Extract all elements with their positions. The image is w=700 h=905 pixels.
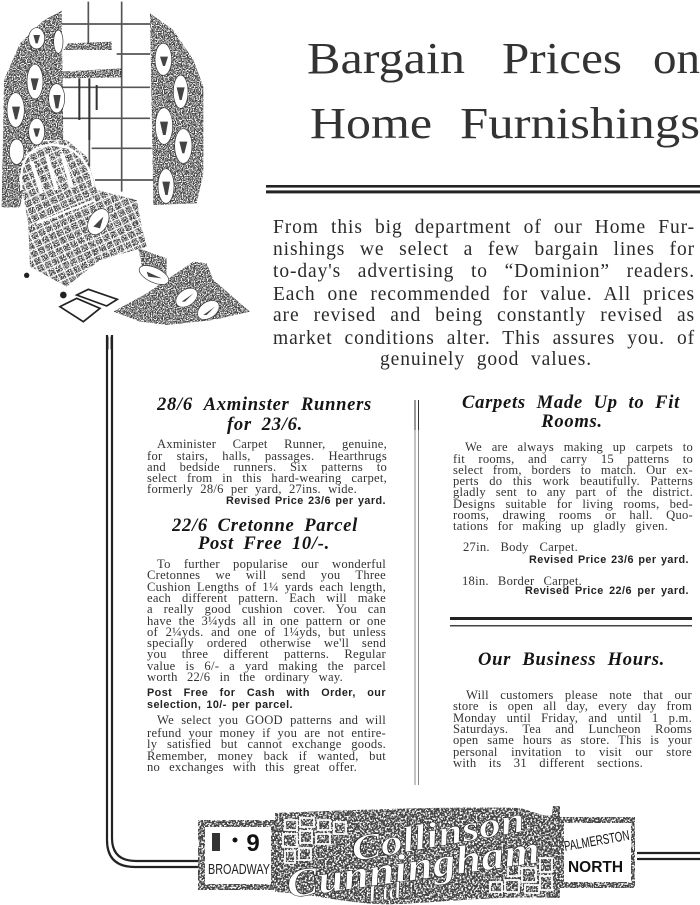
frame rule: left vertical, corner and horizontal to the banner <box>106 335 198 868</box>
prices: carpets <box>462 540 689 597</box>
text: Cretonne Parcel: Cushion Lengths of 1¼ yards each length, <box>147 580 386 594</box>
heading: Carpets Made Up: Rooms. <box>541 411 603 432</box>
oval motifs <box>12 35 215 315</box>
right rule <box>637 853 700 859</box>
text: Carpets Made Up: gladly sent to any part of the district. <box>453 485 693 499</box>
wicker lattice <box>17 140 147 287</box>
title: Bargain <box>307 35 465 83</box>
text: Cretonne Parcel: no exchanges with this great offer. <box>147 760 357 774</box>
intro paragraph: From this big department of our Home Fur- <box>273 217 695 238</box>
text: Cretonne Parcel: selection, 10/- per parcel. <box>147 699 293 711</box>
text: Cretonne Parcel: worth 22/6 in the ordinary way. <box>147 670 343 684</box>
text: Cretonne Parcel: To further popularise our wonderful <box>157 557 386 571</box>
prices: carpets: Revised Price 23/6 per yard. <box>529 554 689 566</box>
text: Our Business Hours: Monday until Friday, and until 1 p.m. <box>453 711 692 725</box>
tassels <box>79 78 97 140</box>
banner: Collinson Cunningham store sign <box>198 800 700 905</box>
heading: Cretonne Parcel: 22/6 Cretonne Parcel <box>172 515 358 536</box>
title: Prices <box>502 35 622 83</box>
left address plate: 9 <box>246 830 260 857</box>
text: Cretonne Parcel: specially ordered otherwise we'll send <box>147 636 386 650</box>
intro paragraph: to-day's advertising to “Dominion” readers. <box>273 261 695 282</box>
left address plate <box>198 820 276 890</box>
heading: Our Business Hours: Our Business Hours. <box>478 649 665 670</box>
text: Cretonne Parcel: a really good cushion cover. You can <box>147 602 386 616</box>
heading: Cretonne Parcel: Post Free 10/-. <box>198 533 330 554</box>
right address plate <box>558 817 635 888</box>
text: Carpets Made Up: tations for making up gladly given. <box>453 519 668 533</box>
text: Axminster Runners: and bedside runners. Six patterns to <box>147 460 387 474</box>
intro paragraph <box>273 217 695 370</box>
intro paragraph: Each one recommended for value. All prices <box>273 284 695 305</box>
books on the floor <box>60 289 117 322</box>
text: Cretonne Parcel: We select you GOOD patterns and will <box>157 713 386 727</box>
text: Cretonne Parcel: ly satisfied but cannot exchange goods. <box>147 737 386 751</box>
text: Our Business Hours: Will customers please note that our <box>466 688 692 702</box>
title: Home <box>310 99 432 148</box>
text: Carpets Made Up: Designs suitable for living rooms, bed- <box>453 497 693 511</box>
prices: carpets: Revised Price 22/6 per yard. <box>525 585 689 597</box>
intro paragraph: nishings we select a few bargain lines for <box>273 239 695 260</box>
text: Axminster Runners: Revised Price 23/6 per yard. <box>226 495 386 507</box>
heading: Carpets Made Up <box>462 392 680 432</box>
text: Our Business Hours: with its 31 different sections. <box>453 756 643 770</box>
curtains <box>2 11 203 207</box>
text: Axminster Runners: for stairs, halls, passages. Hearthrugs <box>147 449 387 463</box>
illustration: wicker chair by curtained window <box>2 2 250 350</box>
heading: Axminster Runners: 28/6 Axminster Runners <box>157 394 372 415</box>
text: Carpets Made Up: select from, borders to match. Our ex- <box>453 463 693 477</box>
text: Carpets Made Up: perts do this work beautifully. Patterns <box>453 474 693 488</box>
text: Cretonne Parcel: Cretonnes we will send you Three <box>147 568 386 582</box>
centre column rule <box>414 400 419 785</box>
right address plate: NORTH <box>568 859 623 876</box>
heading: Carpets Made Up: Carpets Made Up to Fit <box>462 392 680 413</box>
text: Cretonne Parcel: you three different patterns. Regular <box>147 647 386 661</box>
text: Cretonne Parcel: of 2¼yds. and one of 1¼yds, but unless <box>147 625 386 639</box>
text: Axminster Runners <box>147 437 387 507</box>
heading: Axminster Runners <box>157 394 372 435</box>
text: Cretonne Parcel <box>147 557 386 774</box>
prices: carpets: 18in. Border Carpet. <box>462 574 582 588</box>
text: Our Business Hours: personal invitation to visit our store <box>453 745 692 759</box>
text: Axminster Runners: Axminister Carpet Runner, genuine, <box>157 437 387 451</box>
chair and fallen fabric <box>17 140 250 325</box>
intro paragraph: genuinely good values. <box>380 349 592 370</box>
text: Our Business Hours <box>453 688 692 770</box>
cobble network <box>283 818 552 893</box>
title: on <box>653 35 700 83</box>
text: Carpets Made Up <box>453 440 693 533</box>
mottled centre plate <box>275 806 560 904</box>
window frame <box>62 2 153 192</box>
heading: Axminster Runners: for 23/6. <box>227 414 303 435</box>
text: Cretonne Parcel: each different pattern. Each will make <box>147 591 386 605</box>
company name <box>284 799 543 905</box>
intro paragraph: are revised and being constantly revised as <box>273 305 695 326</box>
text: Our Business Hours: store is open all day, every day from <box>453 699 692 713</box>
prices: carpets: 27in. Body Carpet. <box>463 540 578 554</box>
text: Carpets Made Up: rooms, drawing rooms or hall. Quo- <box>453 508 693 522</box>
company name: Cunningham <box>284 827 543 905</box>
text: Cretonne Parcel: Post Free for Cash with Order, our <box>147 687 386 699</box>
intro paragraph: market conditions alter. This assures you. of <box>273 328 695 349</box>
chair back and legs <box>21 145 95 223</box>
text: Cretonne Parcel: value is 6/- a yard making the parcel <box>147 659 386 673</box>
title: Furnishings <box>460 99 700 148</box>
text: Cretonne Parcel: have the 3¼yds all in one pattern or one <box>147 614 386 628</box>
curtain and fabric ovals <box>7 28 223 323</box>
section rule <box>450 617 692 626</box>
company name: Collinson <box>348 800 528 869</box>
text: Cretonne Parcel: Remember, money back if wanted, but <box>147 749 386 763</box>
right address plate: PALMERSTON <box>563 827 631 854</box>
rule stub <box>108 337 111 349</box>
text: Carpets Made Up: We are always making up carpets to <box>465 440 693 454</box>
text: Our Business Hours: open same hours as store. This is your <box>453 733 692 747</box>
title rule <box>266 185 700 194</box>
text: Our Business Hours: Saturdays. Tea and Luncheon Rooms <box>453 722 692 736</box>
left address plate: BROADWAY <box>208 861 270 878</box>
heading: Cretonne Parcel <box>172 515 358 554</box>
text: Axminster Runners: select from in this hard-wearing carpet, <box>147 471 387 485</box>
text: Carpets Made Up: fit rooms, and carry 15 patterns to <box>453 452 693 466</box>
text: Cretonne Parcel: refund your money if you are not entire- <box>147 726 386 740</box>
text: Axminster Runners: formerly 28/6 per yard, 27ins. wide. <box>147 482 357 496</box>
title <box>307 35 700 148</box>
